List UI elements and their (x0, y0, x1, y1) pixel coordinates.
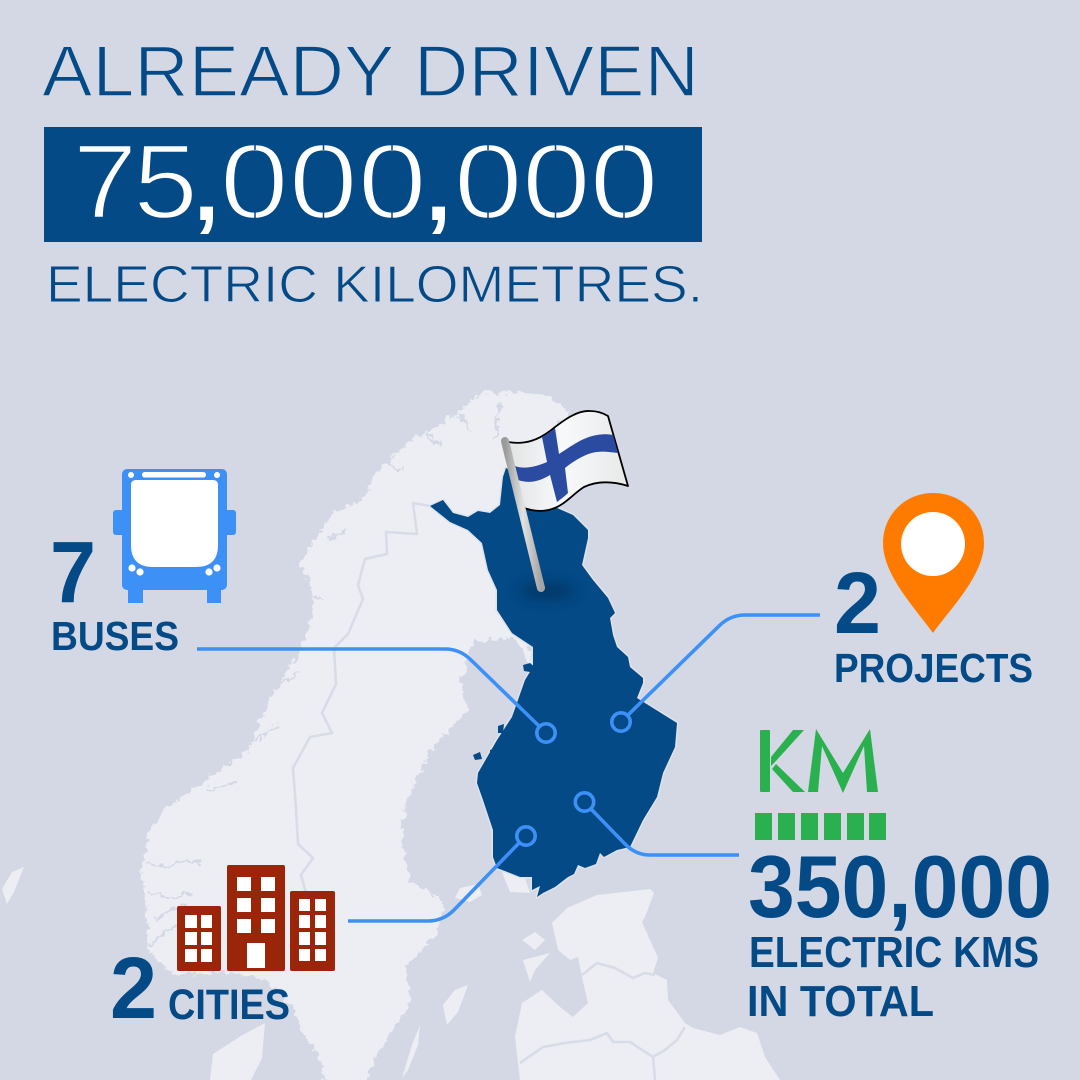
number: 7: 7 (50, 524, 96, 621)
icon: progress blocks (755, 813, 886, 840)
land: Aland islands (455, 872, 530, 902)
icon: bus (113, 469, 236, 603)
number: 75,000,000: 75 (73, 122, 198, 241)
icon: Finnish flag (505, 411, 628, 598)
stat: projects (834, 493, 1033, 691)
stat: cities (110, 865, 335, 1037)
heading: electric kilometres: ELECTRIC KILOMETRES. (46, 256, 703, 314)
number: 75,000,000: 000 (220, 123, 427, 241)
map: Finland (430, 468, 677, 897)
map: Nordic and Baltic land (2, 392, 780, 1080)
number: 350,000: 350,000 (748, 837, 1052, 936)
connector: buses to map (197, 649, 555, 742)
icon: city buildings (177, 865, 335, 971)
land: North Sea island (2, 867, 24, 904)
label: buses: BUSES (51, 613, 179, 659)
stat: buses (50, 469, 236, 659)
fjord strokes (147, 405, 500, 945)
number: 75,000,000 (73, 122, 659, 241)
islands: Finnish coast (473, 663, 536, 760)
stat: kilometres (747, 729, 1052, 1026)
number: 75,000,000: 000 (454, 123, 659, 241)
label: cities: CITIES (168, 981, 290, 1029)
label: in total: IN TOTAL (747, 978, 934, 1026)
border: Norway and Sweden (293, 503, 430, 893)
land: Norway and Sweden (141, 392, 570, 1080)
panel: headline number (44, 122, 702, 242)
number: 2: 2 (110, 940, 157, 1037)
connector: kilometres to map (575, 793, 739, 855)
label: electric kms: ELECTRIC KMS (749, 929, 1039, 977)
heading: already driven: ALREADY DRIVEN (42, 31, 699, 112)
number: 2: 2 (834, 555, 881, 652)
flag pole (505, 441, 541, 588)
land: Baltic states (515, 889, 780, 1080)
label: projects: PROJECTS (834, 645, 1033, 691)
connector: cities to map (348, 827, 535, 921)
number: 75,000,000: , (426, 140, 451, 240)
number: 75,000,000: , (194, 140, 219, 240)
land: Denmark (210, 1023, 265, 1080)
border: Baltic states (520, 963, 685, 1080)
land: Gotland (443, 985, 468, 1025)
icon: KM logo (760, 729, 878, 793)
land: Oland (402, 1025, 420, 1078)
land: Estonian islands (522, 932, 550, 982)
connector: projects to map (612, 615, 820, 731)
icon: location pin (883, 493, 984, 633)
